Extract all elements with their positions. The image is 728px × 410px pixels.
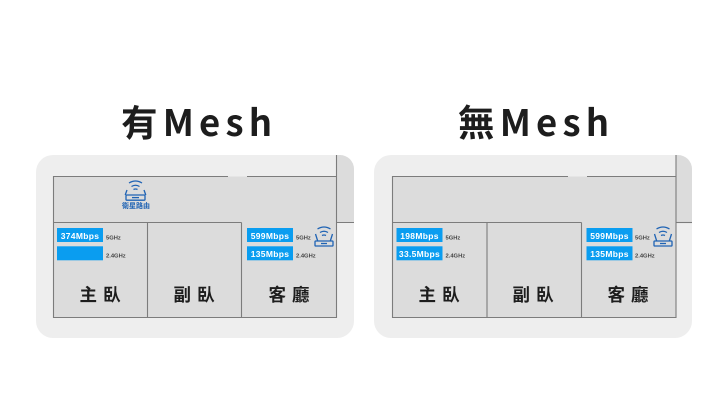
speed: 5GHz living room: [586, 228, 650, 242]
speed: 2.4GHz living room: 135Mbps: [590, 249, 629, 259]
speed: 2.4GHz master bedroom: 33.5Mbps: [399, 249, 440, 259]
speed: 2.4GHz living room: [586, 246, 655, 260]
balcony corner: [337, 155, 354, 222]
speed: 5GHz master bedroom: [396, 228, 460, 242]
card background: [36, 155, 354, 338]
panel: without Mesh floor plan: [374, 155, 692, 338]
room labels: 客廳: [608, 282, 654, 307]
speed: 5GHz living room: 599Mbps: [251, 231, 289, 241]
balcony corner: [676, 155, 692, 222]
speed: 5GHz master bedroom: 374Mbps: [61, 231, 99, 241]
panel: with Mesh floor plan: [36, 155, 354, 338]
room labels: 副臥: [174, 282, 220, 307]
speed: 5GHz living room: 5GHz: [635, 236, 650, 242]
speed: 5GHz master bedroom: 5GHz: [106, 236, 121, 242]
room labels: 客廳: [268, 282, 316, 307]
floor plan walls: [54, 155, 354, 318]
icon: main router: [315, 227, 333, 246]
floor area: [54, 176, 336, 318]
speed: 5GHz master bedroom: [57, 228, 121, 242]
room labels: 主臥: [80, 282, 126, 307]
room labels: 副臥: [512, 282, 560, 307]
title: without Mesh: 無Mesh: [458, 94, 614, 147]
room labels: [418, 282, 654, 307]
speed: 2.4GHz master bedroom: 2.4GHz: [106, 254, 126, 260]
speed: 5GHz master bedroom: 198Mbps: [400, 231, 439, 241]
card background: [374, 155, 692, 338]
floor plan walls: [392, 155, 692, 318]
icon: mesh satellite router: [125, 181, 146, 200]
speed: 5GHz living room: [247, 228, 311, 242]
speed: 2.4GHz living room: [247, 246, 316, 260]
speed: 2.4GHz master bedroom: [57, 246, 126, 260]
speed: 5GHz living room: 599Mbps: [590, 231, 629, 241]
room labels: [80, 282, 316, 307]
speed: 2.4GHz master bedroom: [396, 246, 465, 260]
speed: 5GHz master bedroom: 5GHz: [446, 236, 460, 242]
speed: 2.4GHz master bedroom: 2.4GHz: [446, 254, 465, 260]
title: with Mesh: 有Mesh: [121, 94, 277, 147]
icon: main router: [654, 227, 672, 246]
speed: 2.4GHz living room: 2.4GHz: [296, 254, 316, 260]
label: satellite router: 衛星路由: [122, 201, 150, 211]
room labels: 主臥: [418, 282, 466, 307]
floor area: [392, 176, 676, 318]
speed: 2.4GHz living room: 2.4GHz: [635, 254, 655, 260]
speed: 5GHz living room: 5GHz: [296, 236, 311, 242]
speed: 2.4GHz living room: 135Mbps: [251, 249, 289, 259]
